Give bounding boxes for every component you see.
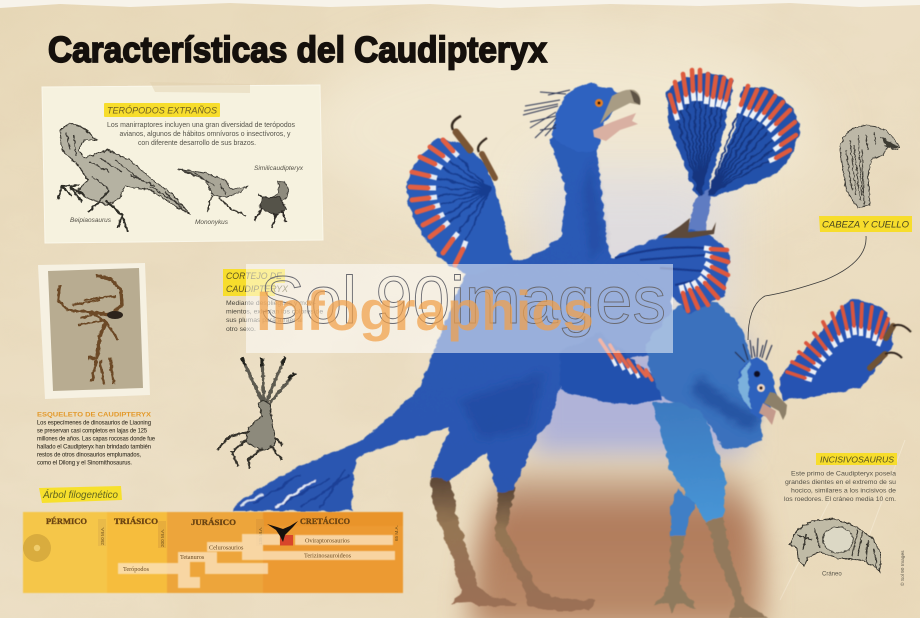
text block: cortejo de Caudipteryx: sus plumas para atraer al bbox=[226, 317, 303, 324]
left wing bbox=[560, 332, 662, 404]
title: Características del Caudipteryx bbox=[48, 29, 547, 70]
Caudipteryx position marker bbox=[280, 535, 293, 546]
text block: Los manirraptores incluyen una gran diversidad de terópodos bbox=[107, 120, 295, 129]
sketch: Beipiaosaurus bbox=[58, 123, 190, 232]
watermark panel: Infographics bbox=[256, 279, 594, 342]
tail feather fan one bbox=[666, 73, 734, 197]
main illustration: standing Caudipteryx bbox=[233, 73, 800, 610]
icon: dinosaur silhouette bbox=[267, 521, 298, 542]
clade labels: Oviraptorosaurios bbox=[305, 538, 350, 544]
chart: phylogenetic timeline bbox=[23, 512, 403, 593]
ear opening bbox=[754, 371, 760, 377]
time markers: 200 M.A. bbox=[160, 529, 165, 547]
head bbox=[738, 358, 776, 420]
feather tips and head details of the second Caudipteryx bbox=[600, 303, 911, 425]
eye bbox=[595, 99, 603, 107]
foot on wing bbox=[662, 218, 716, 238]
text block: Incisivosaurus: Este primo de Caudipteryx poseía bbox=[791, 470, 896, 478]
sketch: Mononykus bbox=[178, 169, 248, 216]
highlight heading bbox=[104, 103, 220, 117]
raised left wing bbox=[406, 138, 513, 276]
period headings: CRETÁCICO bbox=[300, 516, 350, 526]
near thigh bbox=[653, 400, 726, 522]
text block: esqueleto de Caudipteryx: restos de otros dinosaurios emplumados, bbox=[37, 452, 141, 458]
heading: árbol filogenético bbox=[39, 486, 122, 503]
time markers: 135 M.A. bbox=[258, 527, 263, 545]
period headings bbox=[46, 516, 350, 527]
callout: cabeza y cuello bbox=[819, 216, 912, 232]
text block: cortejo de Caudipteryx: otro sexo. bbox=[226, 326, 256, 333]
image credit: © Sol 90 Images bbox=[899, 550, 906, 586]
text block: esqueleto de Caudipteryx: Los especímenes de dinosaurios de Liaoning bbox=[37, 420, 151, 426]
text block: Incisivosaurus: hocico, similares a los incisivos de bbox=[791, 488, 896, 494]
photo: fossil skeleton bbox=[38, 263, 150, 399]
panel: terópodos extraños bbox=[42, 82, 323, 243]
clade labels: Terizinosauroideos bbox=[304, 552, 352, 560]
text block: Incisivosaurus: grandes dientes en el extremo de su bbox=[785, 479, 896, 486]
text block: cortejo de Caudipteryx: CAUDIPTERYX bbox=[226, 284, 289, 294]
wing claws bbox=[456, 132, 470, 150]
text block: esqueleto de Caudipteryx: ESQUELETO DE CAUDIPTERYX bbox=[37, 412, 152, 418]
tail feather fan two bbox=[708, 86, 800, 196]
species labels: Mononykus bbox=[195, 219, 228, 226]
far leg bbox=[670, 490, 700, 537]
time markers: 250 M.A. bbox=[100, 527, 105, 545]
fossil bones bbox=[58, 275, 122, 385]
beak bbox=[600, 90, 640, 124]
species labels bbox=[70, 165, 304, 226]
clade labels: Tetanuros bbox=[180, 554, 205, 561]
species labels: Beipiaosaurus bbox=[70, 217, 111, 224]
sketch: skull bbox=[790, 519, 881, 572]
text block: esqueleto de Caudipteryx: millones de años. Las capas rocosas donde fue bbox=[37, 436, 156, 442]
background: sandy ground bbox=[470, 470, 762, 618]
text block: esqueleto de Caudipteryx: se preservan casi completos en lajas de 125 bbox=[37, 428, 148, 434]
body bbox=[645, 302, 762, 448]
text block: esqueleto de Caudipteryx: hallado el Caudipteryx han brindado también bbox=[37, 444, 151, 450]
text block: cortejo de Caudipteryx bbox=[223, 269, 323, 333]
head bbox=[552, 84, 622, 153]
right leg bbox=[495, 488, 595, 610]
raised tail feathers stem bbox=[686, 190, 712, 232]
sketch: head and neck bbox=[840, 126, 900, 208]
period headings: TRIÁSICO bbox=[114, 516, 158, 526]
main illustration: second Caudipteryx bbox=[560, 300, 893, 618]
clade labels: Terópodos bbox=[123, 566, 150, 573]
eye bbox=[757, 384, 765, 392]
time markers: 65 M.A. bbox=[394, 525, 399, 541]
callout: cabeza y cuello: CABEZA Y CUELLO bbox=[822, 220, 910, 230]
text block: avianos, algunos de hábitos omnívoros o insectívoros, y bbox=[120, 129, 291, 138]
beak bbox=[764, 392, 787, 420]
text block: cortejo de Caudipteryx: mientos, exhibían los colores de bbox=[226, 308, 323, 316]
sketch: Similicaudipteryx bbox=[254, 181, 288, 228]
wing claws bbox=[886, 326, 893, 338]
clade labels bbox=[123, 538, 352, 573]
crest bbox=[735, 338, 772, 362]
callout leader line bbox=[748, 236, 866, 340]
watermark panel: Sol 90images bbox=[260, 263, 666, 338]
feather tips of the standing Caudipteryx bbox=[410, 70, 796, 265]
time markers bbox=[98, 519, 399, 548]
clade labels: Celurosaurios bbox=[209, 544, 244, 552]
geological period bands bbox=[23, 512, 403, 593]
text block: con diferente desarrollo de sus brazos. bbox=[138, 138, 256, 147]
sketch: courtship display tail feathers bbox=[217, 357, 295, 468]
right wing bbox=[780, 300, 893, 400]
text block: cortejo de Caudipteryx: Mediante despliegues y movi- bbox=[226, 300, 316, 307]
highlight heading: TERÓPODOS EXTRAÑOS bbox=[107, 106, 217, 116]
text block: cortejo de Caudipteryx: CORTEJO DE bbox=[226, 271, 283, 281]
text block: Incisivosaurus bbox=[784, 453, 897, 503]
skull caption: Cráneo bbox=[822, 572, 842, 578]
text block: Incisivosaurus: los roedores. El cráneo media 10 cm. bbox=[784, 496, 896, 503]
period headings: JURÁSICO bbox=[191, 517, 236, 527]
text block: esqueleto de Caudipteryx bbox=[37, 412, 156, 466]
left leg bbox=[431, 478, 518, 606]
background: sky behind the dinosaurs bbox=[530, 170, 745, 455]
crest bbox=[523, 90, 570, 138]
body, neck and tail bbox=[233, 85, 672, 511]
near leg bbox=[707, 517, 768, 618]
tail fan highlights bbox=[254, 470, 350, 508]
heading: árbol filogenético: Árbol filogenético bbox=[42, 488, 118, 501]
clade branches bbox=[118, 534, 395, 588]
species labels: Similicaudipteryx bbox=[254, 165, 304, 172]
body shading bbox=[460, 160, 604, 440]
upper wing of standing Caudipteryx overlapping second bird bbox=[607, 218, 730, 314]
period headings: PÉRMICO bbox=[46, 516, 87, 526]
text block: esqueleto de Caudipteryx: como el Dilong y el Sinornithosaurus. bbox=[37, 460, 132, 466]
text block: Incisivosaurus: INCISIVOSAURUS bbox=[820, 454, 894, 464]
dating disc bbox=[23, 534, 51, 562]
text block bbox=[107, 120, 295, 147]
